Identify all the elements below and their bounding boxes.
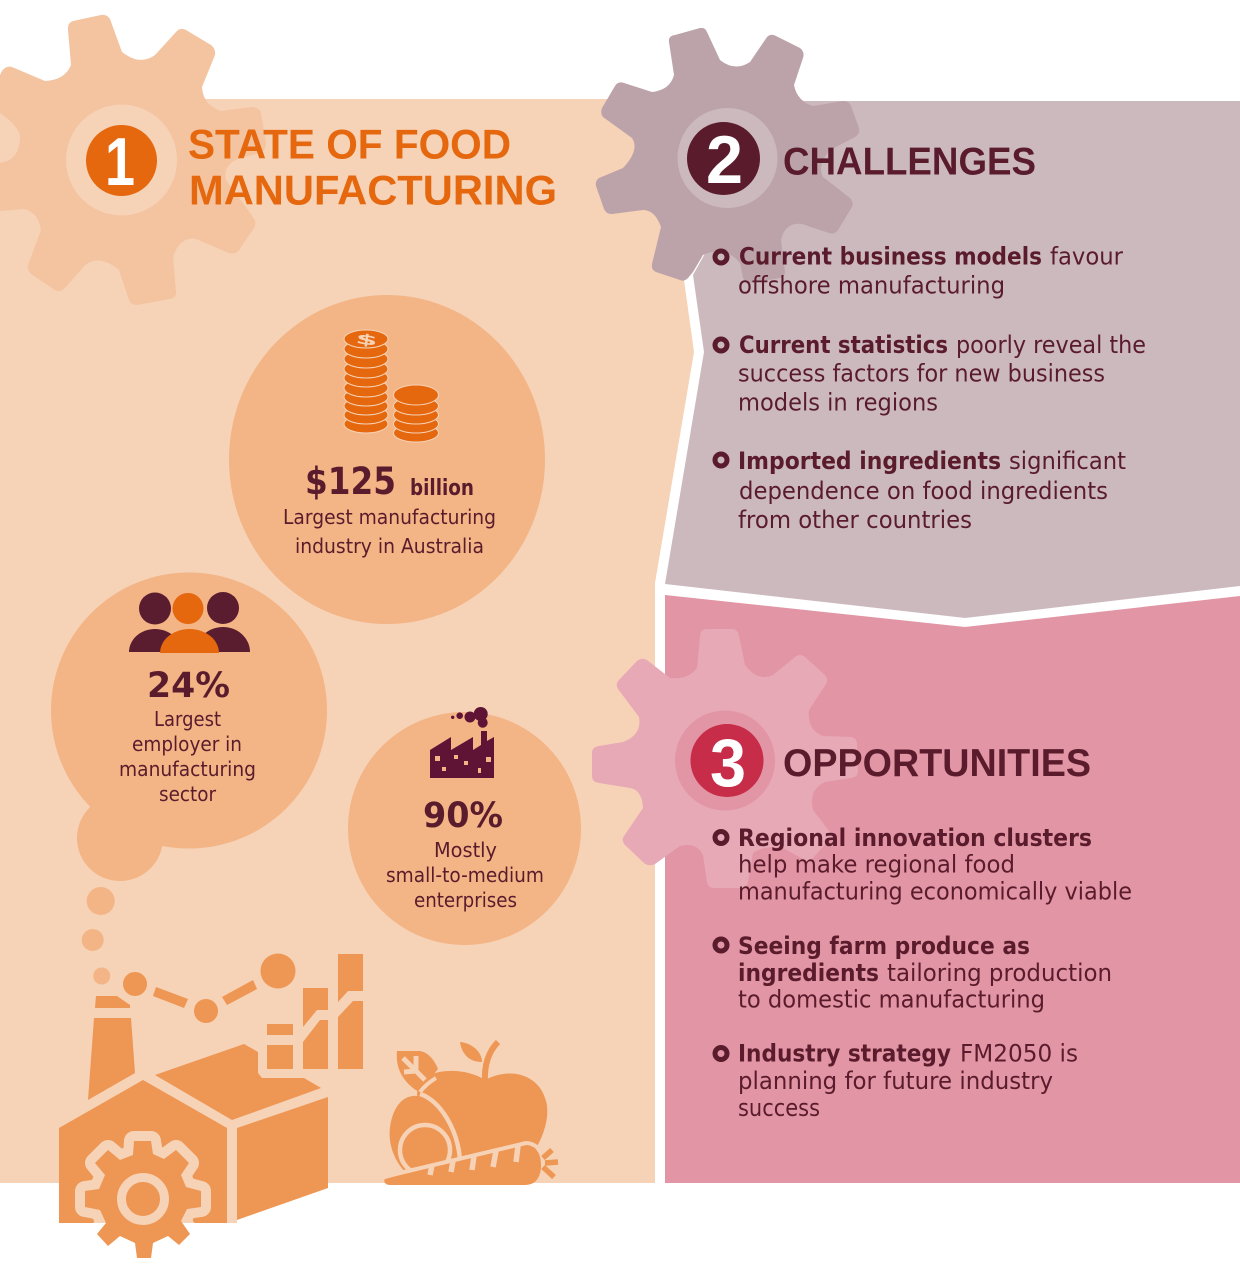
opportunity 2: seeing farm produce as ingredients: tailoring production xyxy=(887,959,1112,987)
opportunity 3: industry strategy: FM2050 is xyxy=(960,1040,1078,1068)
stat bubble: $125 billion: industry in Australia xyxy=(295,534,484,558)
challenge 1: current business models: favour xyxy=(1050,242,1123,270)
stat bubble: 24% thought bubble: manufacturing xyxy=(119,757,256,781)
heading: state of food manufacturing xyxy=(188,120,557,214)
stat bubble: 90%: 90% xyxy=(423,796,503,836)
gear 1 with number badge xyxy=(0,15,266,305)
stat bubble: $125 billion: $125 xyxy=(305,460,396,503)
icon: coin stacks xyxy=(344,330,438,442)
challenge 1: current business models: Current business models xyxy=(739,242,1042,270)
challenge 2: current statistics: Current statistics xyxy=(739,331,948,359)
challenge 3: imported ingredients xyxy=(715,447,1126,534)
panel: state of food manufacturing background xyxy=(0,99,694,1183)
opportunity 1: regional innovation clusters: help make regional food xyxy=(738,850,1015,878)
stat bubble: 90%: small-to-medium xyxy=(386,863,544,887)
icon: factory with smoke xyxy=(430,707,494,778)
panel: challenges background xyxy=(665,101,1240,618)
heading: state of food manufacturing: STATE OF FOOD xyxy=(188,120,511,168)
stat bubble: 24% thought bubble xyxy=(51,572,327,984)
opportunity 3: industry strategy: planning for future industry xyxy=(738,1067,1053,1095)
stat bubble: 24% thought bubble: sector xyxy=(159,782,217,806)
challenge 1: current business models xyxy=(715,242,1123,300)
opportunity 1: regional innovation clusters xyxy=(715,824,1132,906)
stat bubble: 24% thought bubble: 24% xyxy=(147,666,230,706)
stat bubble: $125 billion xyxy=(229,295,545,624)
challenge 2: current statistics: models in regions xyxy=(738,388,938,416)
gear 1 with number badge: 1 xyxy=(105,124,135,200)
opportunity 3: industry strategy: success xyxy=(738,1094,820,1122)
stat bubble: 90% xyxy=(348,707,581,945)
opportunity 2: seeing farm produce as ingredients xyxy=(715,932,1112,1014)
gear 3 with number badge: 3 xyxy=(710,725,746,801)
stat bubble: 90%: enterprises xyxy=(414,888,517,912)
icon: apple, avocado and carrot xyxy=(384,1042,558,1185)
opportunity 3: industry strategy: Industry strategy xyxy=(738,1040,951,1068)
stat bubble: 90%: Mostly xyxy=(434,838,497,862)
gear 3 with number badge xyxy=(592,629,858,888)
opportunity 2: seeing farm produce as ingredients: ingredients xyxy=(738,959,879,987)
stat bubble: $125 billion: billion xyxy=(410,476,474,501)
challenge 1: current business models: offshore manufacturing xyxy=(738,272,1005,300)
stat bubble: 24% thought bubble: employer in xyxy=(132,732,242,756)
challenge 2: current statistics: success factors for new business xyxy=(738,360,1105,388)
icon: three people xyxy=(129,592,250,653)
gear 2 with number badge xyxy=(596,28,859,283)
challenge 2: current statistics xyxy=(715,331,1146,416)
challenge 3: imported ingredients: from other countries xyxy=(738,506,972,534)
heading: state of food manufacturing: MANUFACTURING xyxy=(189,166,557,214)
challenge 2: current statistics: poorly reveal the xyxy=(956,331,1146,359)
heading: challenges: CHALLENGES xyxy=(783,140,1036,184)
opportunity 2: seeing farm produce as ingredients: Seeing farm produce as xyxy=(738,932,1030,960)
opportunity 1: regional innovation clusters: Regional innovation clusters xyxy=(738,824,1092,852)
heading: opportunities: OPPORTUNITIES xyxy=(783,742,1091,785)
stat bubble: $125 billion: $ xyxy=(355,330,379,349)
stat bubble: 24% thought bubble: Largest xyxy=(154,707,221,731)
challenge 3: imported ingredients: dependence on food ingredients xyxy=(739,477,1108,505)
gear 2 with number badge: 2 xyxy=(706,122,743,198)
opportunity 3: industry strategy xyxy=(715,1040,1078,1122)
challenge 3: imported ingredients: Imported ingredients xyxy=(738,447,1001,475)
opportunity 1: regional innovation clusters: manufacturing economically viable xyxy=(738,878,1132,906)
opportunity 2: seeing farm produce as ingredients: to domestic manufacturing xyxy=(738,986,1045,1014)
icon: factory with gear and growth chart xyxy=(59,954,363,1258)
challenge 3: imported ingredients: significant xyxy=(1009,447,1126,475)
stat bubble: $125 billion: Largest manufacturing xyxy=(283,505,496,529)
panel: opportunities background xyxy=(665,595,1240,1183)
